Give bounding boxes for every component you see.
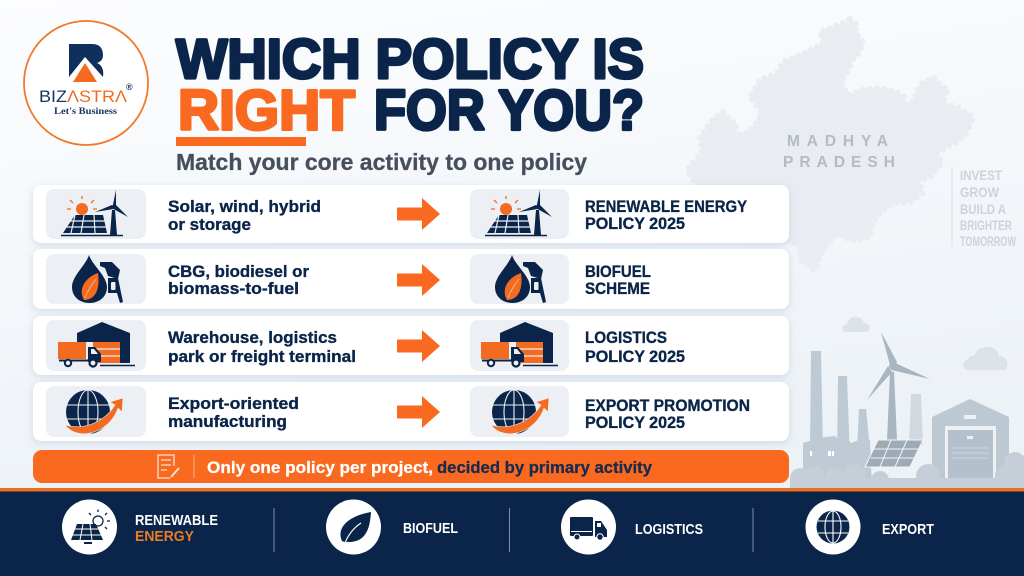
activity text: biomass-to-fuel	[168, 279, 299, 298]
icon: globe policy	[491, 390, 549, 434]
map label: MADHYA	[787, 133, 888, 150]
footer item: renewable energy	[62, 500, 218, 554]
activity text: park or freight terminal	[168, 347, 356, 366]
map: Madhya Pradesh	[687, 19, 973, 270]
icon: globe and arrow	[65, 390, 123, 434]
logo: BizAstra: BIZ	[39, 87, 67, 106]
chimneys	[810, 351, 823, 450]
footer item: biofuel	[326, 500, 458, 554]
callout: one policy rule	[33, 450, 789, 483]
arrow	[397, 396, 440, 428]
activity text: Solar, wind, hybrid	[168, 197, 321, 216]
activity text: Export-oriented	[168, 394, 299, 413]
activity text: Warehouse, logistics	[168, 328, 337, 347]
logo: BizAstra	[24, 21, 148, 145]
title	[176, 27, 644, 146]
footer item: renewable energy: ENERGY	[135, 529, 194, 545]
title: WHICH POLICY IS	[176, 27, 644, 90]
icon: fuel drop policy	[495, 255, 546, 303]
icon: solar and wind	[61, 190, 128, 236]
footer item: export	[806, 500, 934, 554]
footer item: logistics	[561, 500, 703, 554]
activity text	[168, 328, 356, 366]
activity text: manufacturing	[168, 412, 287, 431]
policy name: EXPORT PROMOTION	[585, 396, 750, 415]
arrow	[397, 264, 440, 296]
footer item: biofuel: BIOFUEL	[403, 521, 458, 537]
icon: solar and wind policy	[485, 190, 552, 236]
row: logistics	[33, 316, 789, 375]
solar panel	[865, 440, 923, 467]
policy name: SCHEME	[585, 279, 650, 298]
callout: one policy rule: decided by primary activity	[437, 459, 653, 477]
icon: document	[158, 455, 179, 478]
policy name: POLICY 2025	[585, 214, 685, 233]
footer item: export: EXPORT	[882, 522, 934, 538]
policy name: POLICY 2025	[585, 413, 685, 432]
policy name	[585, 197, 748, 233]
arrow	[397, 330, 440, 362]
illustration: industrial skyline	[790, 317, 1024, 490]
policy name: LOGISTICS	[585, 328, 667, 347]
activity text	[168, 197, 321, 234]
activity text: CBG, biodiesel or	[168, 262, 309, 281]
warehouse	[932, 399, 1009, 488]
policy name	[585, 396, 750, 432]
arrow	[397, 198, 440, 230]
activity text	[168, 394, 299, 431]
icon: warehouse and truck	[58, 322, 135, 366]
logo: BizAstra: ®	[126, 82, 133, 92]
footer item: renewable energy: RENEWABLE	[135, 513, 218, 529]
side slogan: BUILD A	[960, 202, 1006, 217]
side slogan	[952, 167, 1016, 249]
side slogan: GROW	[960, 185, 999, 200]
activity text: or storage	[168, 215, 251, 234]
callout: one policy rule: Only one policy per project,	[207, 459, 433, 477]
title: FOR YOU?	[374, 78, 644, 142]
row: renewable energy	[33, 185, 789, 243]
shrubs	[790, 452, 1024, 490]
footer band	[0, 488, 1024, 576]
activity text	[168, 262, 309, 298]
wind turbine	[867, 332, 930, 440]
clouds	[842, 317, 1008, 370]
side slogan: INVEST	[960, 168, 1003, 183]
icon: warehouse policy	[481, 322, 558, 366]
row: biofuel	[33, 249, 789, 309]
subtitle: Match your core activity to one policy	[176, 149, 587, 175]
policy name: BIOFUEL	[585, 262, 651, 281]
policy name	[585, 262, 651, 298]
logo: BizAstra: ΛSTRΛ	[67, 87, 128, 106]
map label	[783, 133, 895, 171]
policy name: POLICY 2025	[585, 347, 685, 366]
row: export	[33, 382, 789, 441]
map label: PRADESH	[783, 154, 895, 171]
footer item: logistics: LOGISTICS	[635, 522, 703, 538]
policy name	[585, 328, 685, 366]
logo: BizAstra: Let's Business	[54, 107, 117, 117]
icon: fuel drop and nozzle	[72, 255, 123, 303]
title: RIGHT	[178, 78, 355, 142]
policy name: RENEWABLE ENERGY	[585, 197, 748, 216]
